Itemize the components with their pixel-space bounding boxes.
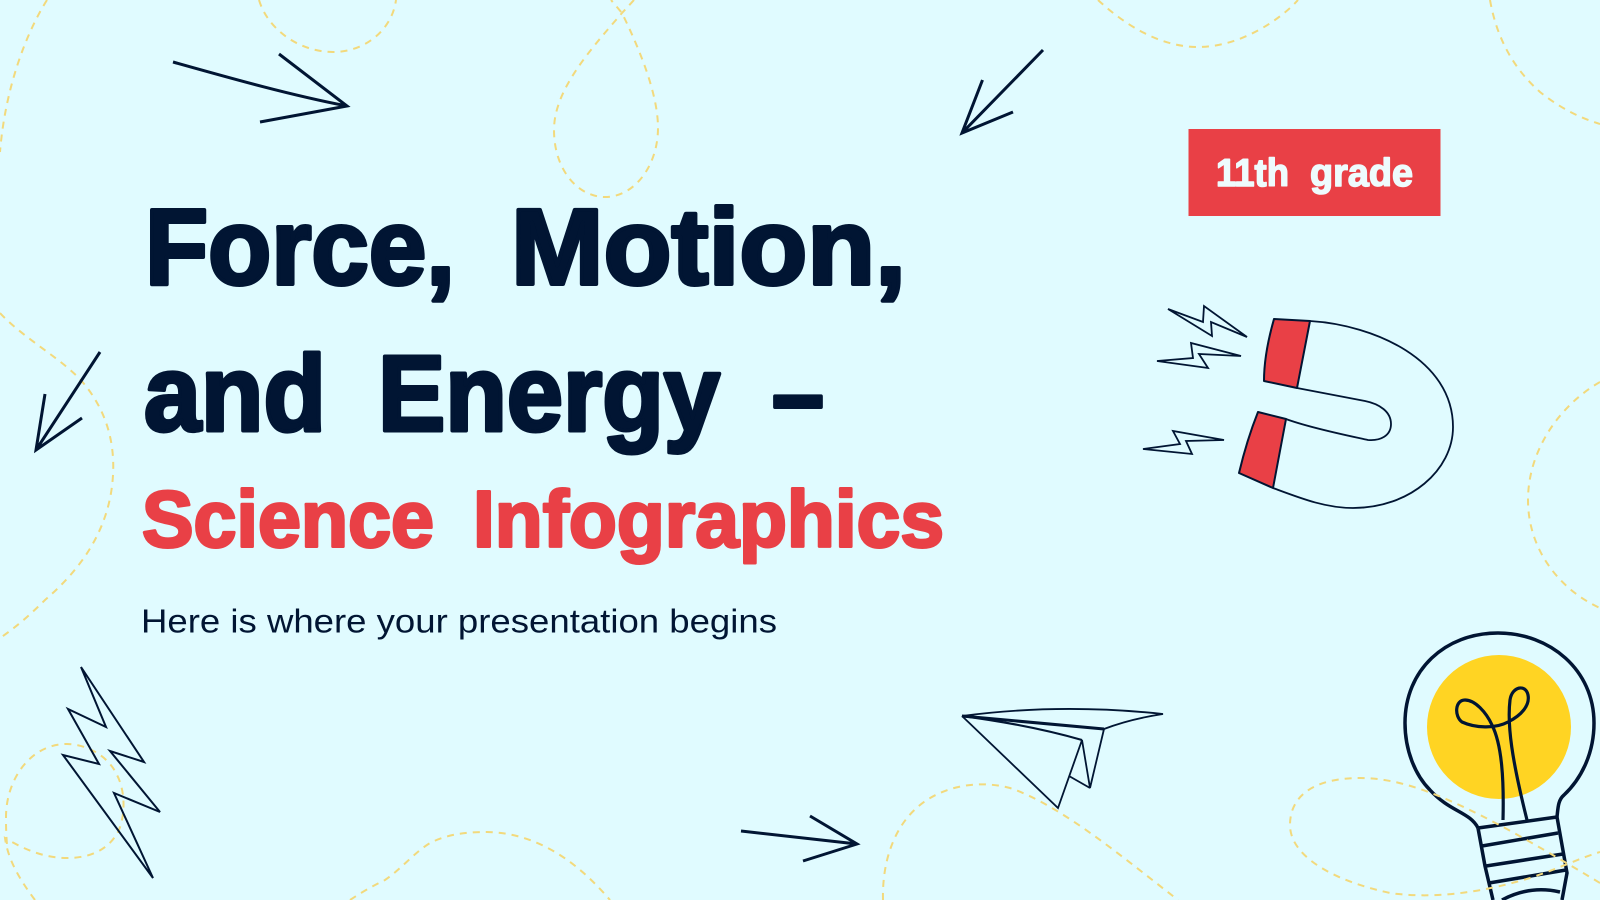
subtitle heading: Science Infographics: Infographics (473, 474, 944, 564)
arrow: left (36, 352, 100, 450)
icon: lightning bolt (63, 667, 160, 878)
tagline text: Here is where your presentation begins (141, 604, 777, 640)
arrow: bottom centre (741, 816, 857, 861)
title: Force, (145, 186, 455, 307)
icon: light bulb (1405, 633, 1594, 900)
subtitle heading: Science Infographics: Science (142, 474, 434, 564)
subtitle heading: Science Infographics (142, 474, 944, 564)
title: Motion, (511, 186, 906, 307)
arrow: top left (173, 54, 347, 122)
arrow: top centre (962, 50, 1043, 133)
icon: paper plane (962, 709, 1163, 808)
title: and (144, 332, 326, 454)
title: Energy (378, 332, 720, 454)
title: – (772, 332, 824, 454)
grade badge: grade (1310, 152, 1413, 195)
icon: magnet (1143, 306, 1453, 508)
grade badge (1188, 129, 1440, 216)
title (144, 186, 906, 454)
grade badge: 11th (1216, 152, 1289, 195)
